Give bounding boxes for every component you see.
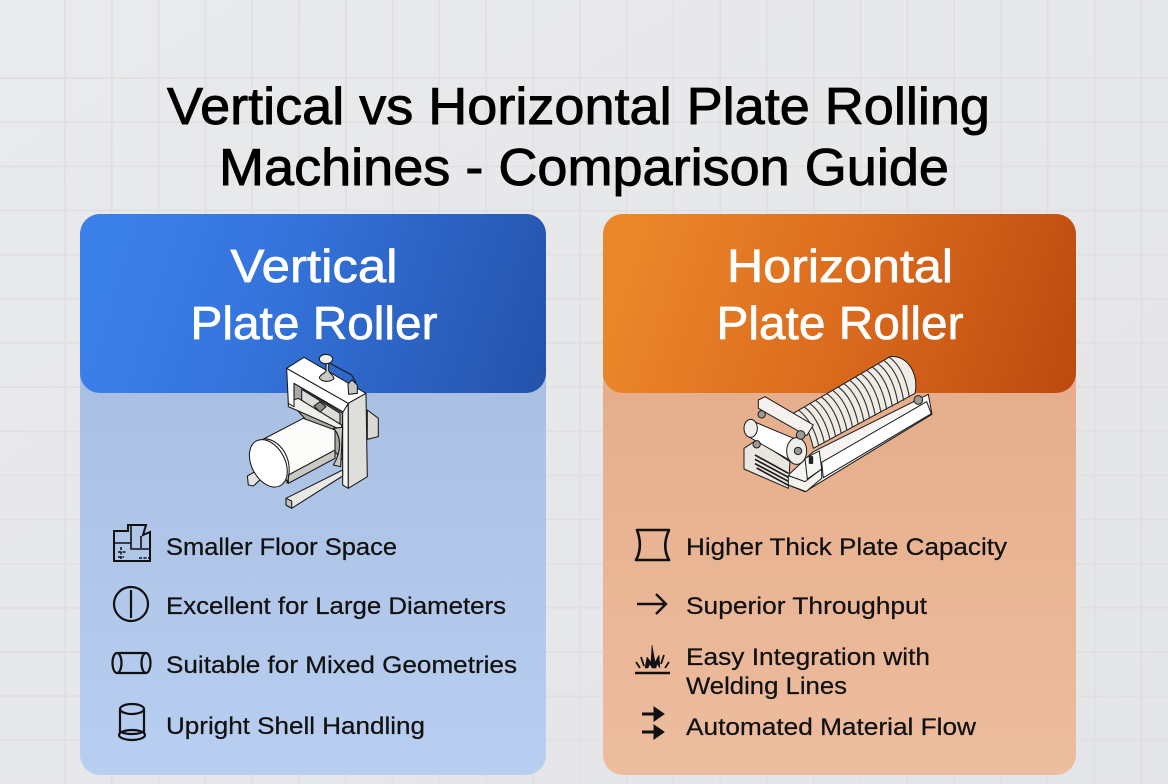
nuts: [758, 411, 765, 418]
illustration: horizontal machine: [744, 356, 932, 492]
title: [167, 78, 990, 197]
label: automated material flow: Automated Material Flow: [686, 714, 977, 741]
icon: welding sparks: [635, 645, 670, 673]
right post: [343, 403, 348, 488]
icon: floor plan: [114, 525, 150, 561]
label: large diameters: Excellent for Large Diameters: [166, 593, 506, 620]
large ribbed roller: [793, 356, 916, 448]
label: smaller floor space: Smaller Floor Space: [166, 534, 397, 561]
top screw and lever: [330, 363, 356, 383]
icon: thick plate: [636, 530, 669, 560]
label: thick plate capacity: Higher Thick Plate Capacity: [686, 534, 1007, 561]
lower rail: [286, 470, 343, 508]
label: welding lines integration: Welding Lines: [686, 673, 847, 700]
icon: arrow: [637, 594, 666, 614]
heading: horizontal plate roller: Plate Roller: [716, 297, 964, 349]
label: mixed geometries: Suitable for Mixed Geometries: [166, 652, 517, 679]
cylinder body: [262, 418, 335, 483]
heading: horizontal plate roller: Horizontal: [727, 240, 953, 292]
features: horizontal: [635, 530, 1007, 741]
features: vertical: [112, 525, 517, 740]
panel header: horizontal: [603, 214, 1076, 393]
panel header: vertical: [80, 214, 546, 393]
rear beam: [367, 410, 378, 439]
left foot: [247, 472, 262, 486]
left post and top beam: [287, 368, 348, 415]
icon: horizontal cylinder: [112, 653, 150, 673]
label: upright shell handling: Upright Shell Handling: [166, 713, 425, 740]
top bracket: [758, 397, 813, 436]
label: superior throughput: Superior Throughput: [686, 593, 927, 620]
window interior: [294, 383, 343, 460]
panel: horizontal plate roller: [603, 214, 1076, 775]
panel: vertical plate roller: [80, 214, 546, 775]
heading: vertical plate roller: Vertical: [230, 240, 398, 292]
label: welding lines integration: Easy Integration with: [686, 644, 930, 671]
heading: horizontal plate roller: [716, 240, 964, 349]
cross bar: [288, 398, 342, 430]
title: Machines - Comparison Guide: [219, 139, 949, 197]
icon: upright shell: [119, 704, 145, 740]
title: Vertical vs Horizontal Plate Rolling: [167, 78, 990, 136]
heading: vertical plate roller: [190, 240, 438, 349]
icon: circle with diameter line: [114, 587, 148, 621]
panel body: vertical: [80, 214, 546, 775]
label: welding lines integration: [686, 644, 930, 700]
illustration: vertical machine: [242, 354, 378, 508]
upper roller: [747, 420, 802, 460]
panel body: horizontal: [603, 214, 1076, 775]
bed: [788, 394, 932, 492]
heading: vertical plate roller: Plate Roller: [190, 297, 438, 349]
lower striped rollers: [744, 440, 790, 488]
front block: [788, 469, 822, 492]
icon: double arrows: [642, 707, 664, 739]
flange: [333, 427, 343, 467]
